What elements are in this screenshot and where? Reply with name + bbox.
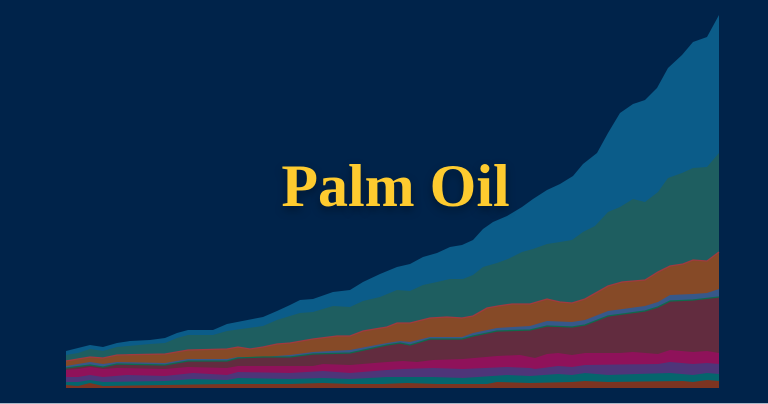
area: magenta band — [66, 350, 719, 388]
area: purple band — [66, 362, 719, 388]
area: top blue band — [66, 15, 719, 388]
title: Palm Oil — [281, 153, 510, 219]
line: red upper edge of orange band — [66, 252, 719, 361]
line: green upper edge of maroon band — [66, 297, 719, 368]
area: maroon band — [66, 297, 719, 388]
area: orange band — [66, 252, 719, 388]
area: teal lower band — [66, 373, 719, 388]
area: rust base band — [66, 380, 719, 388]
area: teal-green band — [66, 153, 719, 388]
area: steel blue band — [66, 289, 719, 388]
